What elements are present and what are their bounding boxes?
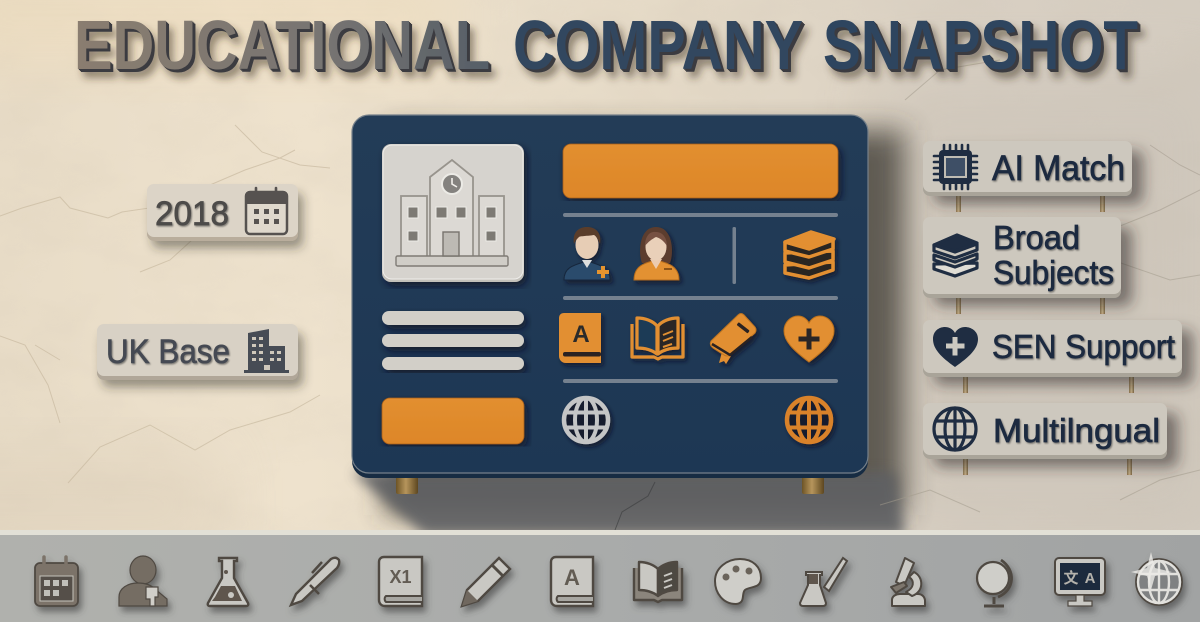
title: EDUCATIONAL [74,6,490,84]
tag: founding year 2018: 2018 [155,195,229,233]
icon: navy globe [934,408,976,450]
divider lines [563,213,838,383]
tag: Multilingual [923,403,1167,475]
icon: translation monitor: 文 [1063,569,1079,587]
bottom icon strip [0,530,1200,622]
icon: dark book stack [934,235,977,276]
icon: book with letter A [559,313,601,363]
school tile [382,144,524,282]
icon: calendar [246,188,287,234]
icon: flask and brush [800,558,847,606]
icon: microscope [891,558,925,606]
icon: office building [244,329,289,373]
menu lines [382,311,524,370]
tag: AI Match: AI Match [992,149,1125,188]
icon: calendar [35,557,78,606]
tag: founding year 2018 [147,184,298,241]
icon: male staff [564,227,610,280]
main navy panel [352,115,868,494]
icon: heart with plus [784,316,834,362]
orange button [382,398,524,444]
icon: pencil [462,558,510,606]
icon: sparkling globe [1131,552,1182,605]
tag: Broad Subjects [923,217,1121,314]
icon: A book: A [564,565,580,590]
tag: UK Base [97,324,298,380]
icon: palette [715,559,761,604]
icon: translation monitor: A [1085,570,1096,587]
icon: open book [634,562,682,602]
tag: Broad Subjects: Broad [993,219,1080,256]
icon: orange open book [632,318,683,359]
icon: orange globe [787,398,831,442]
icon: tilted book with bookmark [710,314,756,364]
icon: female staff [634,227,679,280]
icon: book with letter A: A [572,321,590,348]
icon: navy heart with plus [933,327,978,367]
icon: person [119,556,167,606]
panel mounting feet [396,476,824,494]
icon: A book [551,557,593,606]
icon: desk globe [977,560,1012,606]
icon: X1 book [379,557,422,606]
title [74,6,1138,84]
tag: Broad Subjects: Subjects [993,254,1114,291]
icon: orange book stack [785,232,834,278]
icon: school building [396,160,508,266]
tag: Multilingual: Multilngual [993,412,1160,449]
icon: flask [208,558,248,606]
tag: UK Base: UK Base [106,333,230,371]
tag: SEN Support: SEN Support [992,328,1175,365]
orange heading bar [563,144,838,198]
tag: AI Match [923,141,1132,212]
icon: pen [291,558,339,605]
tag: SEN Support [923,320,1182,393]
icon: AI chip [934,145,977,189]
icon: translation monitor [1055,558,1105,606]
title: COMPANY [513,6,803,84]
icon: X1 book: X1 [389,567,412,587]
icon: silver globe [564,398,608,442]
